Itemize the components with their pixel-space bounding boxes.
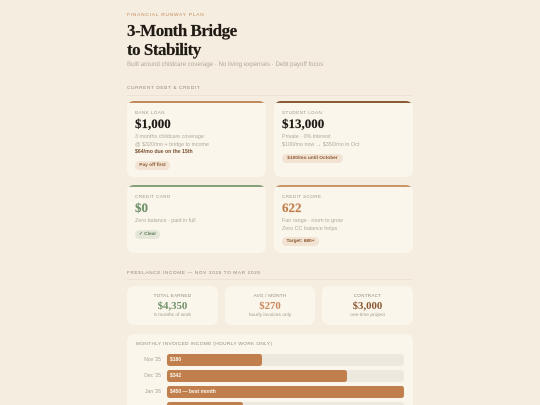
pill: pay off first: Pay off first [139, 163, 166, 168]
due note: $64/mo due on the 15th [135, 149, 193, 155]
stat: contract: one-time project [350, 313, 385, 318]
stat: total earned: TOTAL EARNED [154, 293, 191, 298]
description: credit card: Zero balance · paid in full [135, 218, 196, 224]
stat: contract: CONTRACT [354, 293, 381, 298]
month label: Jan: Jan '26 [145, 389, 161, 395]
chart title: MONTHLY INVOICED INCOME (HOURLY WORK ONLY) [136, 342, 272, 347]
stat: average per month: $270 [259, 300, 281, 312]
stat: total earned [127, 286, 218, 325]
section heading: current debt and credit: CURRENT DEBT & CREDIT [127, 86, 200, 91]
value: credit score: 622 [282, 200, 302, 215]
stat: total earned: 5 months of work [154, 313, 191, 318]
month label: Nov: Nov '25 [144, 357, 161, 363]
description: student loan [282, 134, 360, 148]
pill: clear: ✓ Clear [139, 232, 156, 237]
description: bank loan: @ $320/mo + bridge to income [135, 142, 209, 148]
value: student loan: $13,000 [282, 116, 324, 131]
stat: contract [322, 286, 413, 325]
bar: Nov: $180 [170, 357, 181, 363]
pill: until october: $100/mo until October [287, 156, 338, 161]
stat: total earned: $4,350 [158, 300, 187, 312]
stat: average per month: AVG / MONTH [254, 293, 286, 298]
bar: Feb [167, 402, 404, 405]
label: student loan: STUDENT LOAN [282, 110, 322, 115]
subtitle: Built around childcare coverage · No living expenses · Debt payoff focus [127, 61, 323, 68]
description: bank loan [135, 134, 209, 148]
panel: student loan [274, 101, 413, 177]
pill: target [282, 237, 319, 246]
bar: Dec: $342 [170, 373, 181, 379]
title [127, 21, 237, 59]
description: bank loan: 3 months childcare coverage [135, 134, 204, 140]
bar: Nov [167, 354, 404, 366]
section heading: freelance income: FREELANCE INCOME — NOV 2025 TO MAR 2026 [127, 271, 261, 276]
panel: credit card [127, 185, 266, 253]
stat: contract: $3,000 [353, 300, 382, 312]
value: bank loan: $1,000 [135, 116, 171, 131]
pill: pay off first [135, 161, 170, 170]
stat: average per month: hourly invoices only [249, 313, 291, 318]
bar: Jan [167, 386, 404, 398]
panel: bank loan [127, 101, 266, 177]
description: credit score: Fair range · room to grow [282, 218, 343, 224]
description: credit score [282, 218, 343, 232]
pill: until october [282, 154, 343, 162]
panel: credit score [274, 185, 413, 253]
pill: target: Target: 680+ [286, 239, 315, 244]
pill: clear [135, 230, 160, 238]
panel: monthly invoiced income chart [127, 334, 413, 405]
eyebrow label: FINANCIAL RUNWAY PLAN [127, 13, 205, 18]
value: credit card: $0 [135, 200, 148, 215]
bar: Dec [167, 370, 404, 382]
label: credit card: CREDIT CARD [135, 194, 171, 199]
title: 3-Month Bridge [127, 21, 237, 40]
description: student loan: $100/mo now → $350/mo in Oct [282, 142, 359, 148]
stat: average per month [225, 286, 315, 325]
description: student loan: Private · 0% interest [282, 134, 331, 140]
month label: Dec: Dec '25 [144, 373, 161, 379]
title: to Stability [127, 40, 201, 59]
bar: Jan: $450 — best month [170, 389, 216, 395]
label: credit score: CREDIT SCORE [282, 194, 321, 199]
label: bank loan: BANK LOAN [135, 110, 165, 115]
description: credit score: Zero CC balance helps [282, 226, 337, 232]
